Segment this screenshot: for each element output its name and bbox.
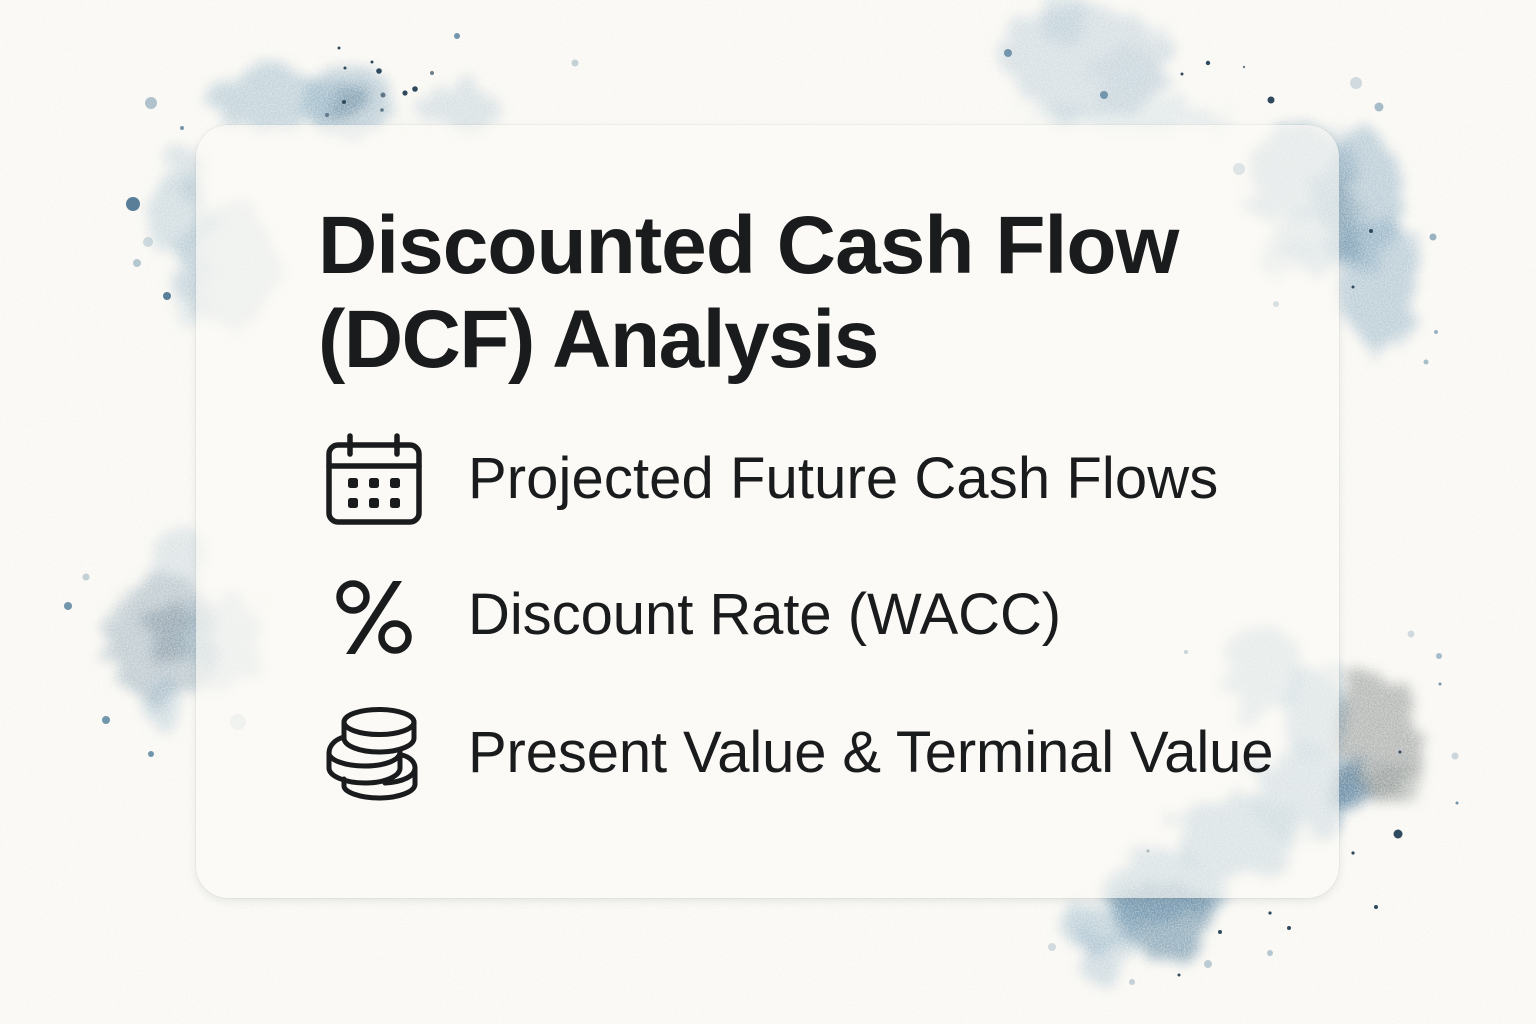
top centre right [997,7,1173,117]
right [1246,129,1350,221]
title: (DCF) Analysis [318,294,878,385]
bottom right [1220,628,1304,716]
left middle [109,578,221,702]
list item: present and terminal value: Present Value & Terminal Value [468,720,1273,785]
title [318,200,1180,385]
list item: projected cash flows: Projected Future Cash Flows [468,446,1218,511]
top left [212,70,328,130]
panel: main card [196,125,1339,898]
title: Discounted Cash Flow [318,200,1178,291]
list item: discount rate: Discount Rate (WACC) [468,582,1061,647]
icon: calendar [326,433,422,525]
icon: coins [326,707,418,800]
icon: percent [336,580,412,654]
